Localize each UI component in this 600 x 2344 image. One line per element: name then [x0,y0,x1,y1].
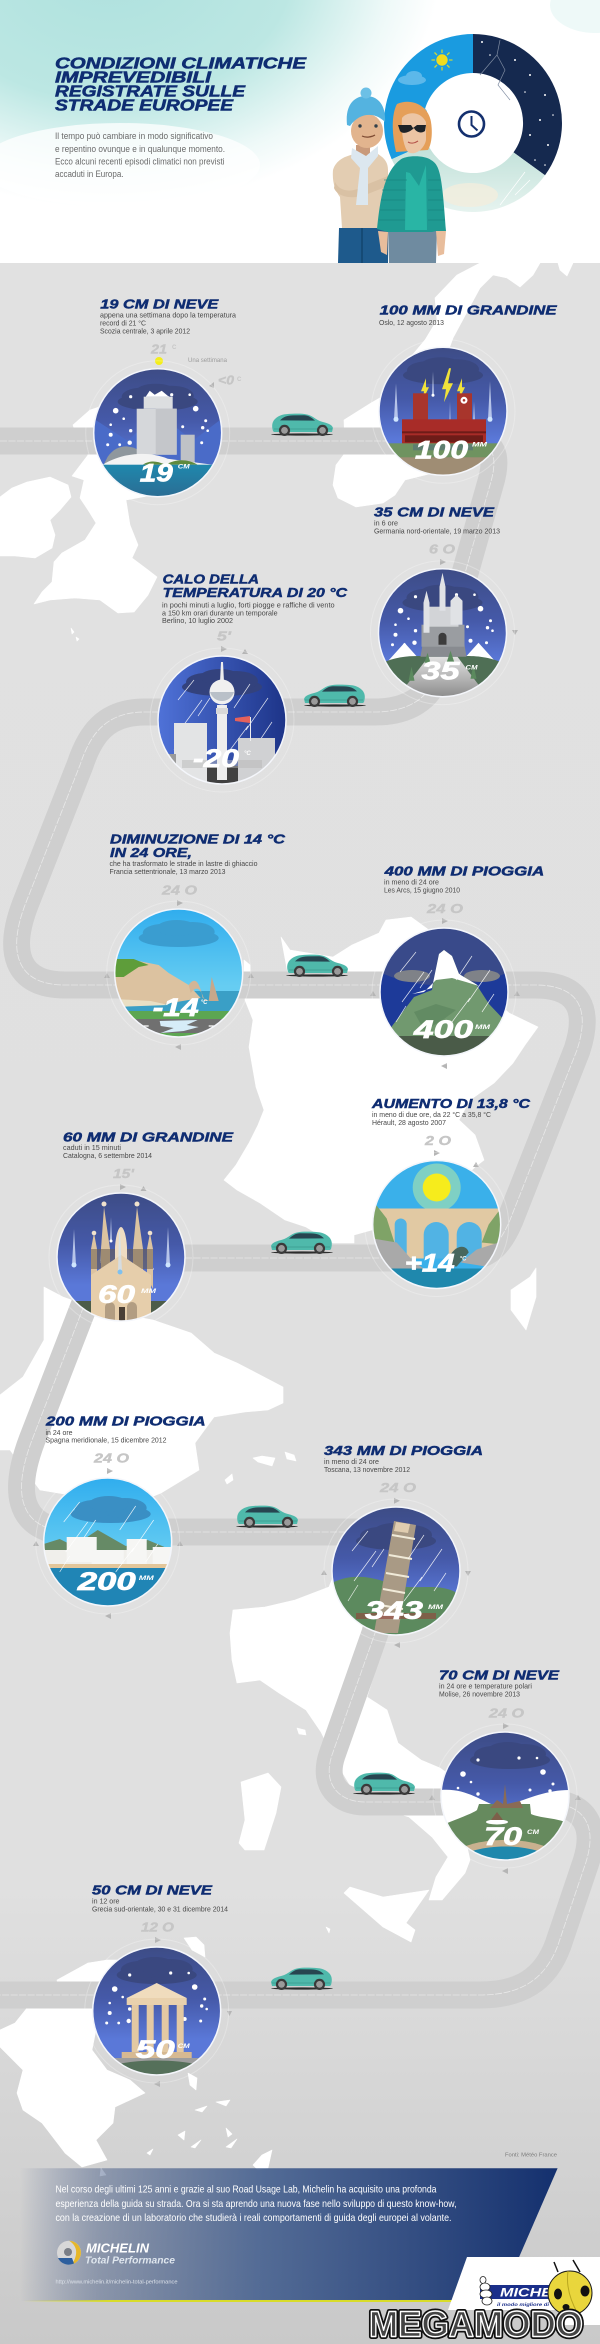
scene: white cliffs with icy road [107,901,251,1045]
description: caduti in 15 minuti [63,1143,121,1152]
Michelin banner [480,2276,556,2307]
Michelin banner: il modo migliore di [497,2302,550,2307]
footer text: con la creazione di un laboratorio che studierà i reali comportamenti di guida degli europei al volante. [56,2213,452,2224]
description [372,1110,491,1127]
description: Toscana, 13 novembre 2012 [324,1465,410,1474]
timeline label [33,1451,183,1619]
heading: 400 MM DI PIOGGIA [383,864,544,878]
map of Europe (white land) [0,263,573,2176]
scene: castle on hill: CM [466,666,479,672]
title: IMPREVEDIBILI [55,70,212,86]
scene: rainy mountain: 400 [413,1016,473,1044]
scene: rainy mountain [372,920,516,1064]
ring segment: clear sky [384,34,473,159]
timeline label: 24 O [488,1706,524,1721]
description: Oslo, 12 agosto 2013 [379,318,444,327]
timeline labels [150,341,242,388]
ladybug icon [548,2260,592,2315]
description: Molise, 26 novembre 2013 [439,1690,520,1698]
Michelin wordmark: Total Performance [85,2255,176,2266]
event 7: heat in Hérault [365,1097,531,1296]
scene: Sagrada Familia in hail: MM [141,1289,157,1295]
timeline label: 24 O [426,901,463,916]
description [374,518,500,535]
scene: leaning tower of Pisa [324,1499,468,1643]
heading: 60 MM DI GRANDINE [63,1130,234,1144]
scene: TV tower in storm [150,648,294,792]
description: in meno di 24 ore [324,1457,379,1466]
description: Francia settentrionale, 13 marzo 2013 [110,867,226,876]
scene: Sagrada Familia in hail: 60 [98,1281,135,1309]
event 6: rain at Les Arcs [370,864,544,1069]
description: Spagna meridionale, 15 dicembre 2012 [46,1436,166,1444]
description [384,878,460,894]
scene: white cliffs with icy road: -14 [153,994,199,1022]
description: in meno di 24 ore [384,878,439,886]
heading: IN 24 ORE, [110,846,192,860]
heading [163,572,348,600]
MEGAMODO wordmark: MEGAMODO [369,2304,583,2344]
description [110,859,258,876]
heading: 19 CM DI NEVE [100,297,219,311]
description: Les Arcs, 15 giugno 2010 [384,886,460,894]
event 5: temperature drop in northern France [104,832,286,1050]
heading: 200 MM DI PIOGGIA [45,1415,206,1429]
timeline label [424,1133,479,1167]
timeline labels: C [237,377,242,383]
event 12: snow in Greece [85,1883,232,2087]
road [0,441,590,1995]
title: CONDIZIONI CLIMATICHE [55,56,307,72]
title [55,56,307,115]
scene: castle in snow: 19 [140,460,173,488]
description [92,1896,228,1914]
event 4: temperature drop in Berlin [150,572,348,792]
source note: Fonti: Météo France [505,2152,557,2158]
intro paragraph: accaduti in Europa. [55,169,124,179]
timeline label: 24 O [161,883,197,898]
timeline label: 12 O [141,1919,174,1934]
car [304,685,366,707]
scene: coast town in rain: 200 [76,1568,136,1596]
description: Catalogna, 6 settembre 2014 [63,1151,152,1160]
description: in 12 ore [92,1896,120,1906]
heading: 343 MM DI PIOGGIA [324,1444,483,1458]
description [46,1428,166,1444]
car [286,955,348,977]
description [63,1143,152,1160]
heading: 100 MM DI GRANDINE [380,303,557,317]
timeline label: 15' [113,1166,135,1181]
scene: Greek temple in snow: 50 [136,2036,175,2064]
timeline label [113,1166,146,1191]
description: in 24 ore e temperature polari [439,1682,532,1690]
watermark badge [369,2257,600,2344]
heading: CALO DELLA [163,572,259,586]
description: record di 21 °C [100,318,146,328]
description [324,1457,410,1474]
scene: snowy village [433,1724,577,1868]
scene: aqueduct under sun: +14 [405,1250,455,1278]
timeline label: 24 O [379,1480,416,1495]
car [271,1968,333,1990]
scene: castle on hill: 35 [422,658,461,686]
scene: city hall under hail [372,346,508,476]
timeline label: 2 O [424,1133,451,1148]
timeline labels: <0 [218,372,235,388]
scene: leaning tower of Pisa: MM [428,1605,444,1611]
intro paragraph: Il tempo può cambiare in modo significativo [55,131,213,141]
heading: 35 CM DI NEVE [374,506,495,520]
timeline labels: Una settimana [188,358,228,364]
description: Germania nord-orientale, 19 marzo 2013 [374,526,500,535]
header background sky [0,0,600,263]
intro paragraph [55,131,225,179]
event 3: snow in Germany [370,506,518,705]
scene: castle in snow: CM [178,465,191,471]
intro paragraph: Ecco alcuni recenti episodi climatici non previsti [55,156,224,166]
scene: leaning tower of Pisa: 343 [365,1597,423,1625]
scene: Sagrada Familia in hail [49,1185,193,1329]
timeline label [141,1919,232,2087]
heading: AUMENTO DI 13,8 °C [371,1097,531,1111]
intro paragraph: e repentino ovunque e in qualunque momento. [55,144,225,154]
scene: coast town in rain: MM [139,1576,155,1582]
timeline label: 5' [217,629,232,644]
timeline labels: 21 [150,341,167,356]
description [100,310,236,336]
scene: snowy village: CM [527,1830,540,1836]
description: a 150 km orari durante un temporale [162,608,278,617]
timeline label [217,629,248,654]
Michelin logo icon [57,2241,81,2265]
timeline label: 6 O [429,541,455,556]
ring segment: starry night [473,34,562,175]
scene: rainy mountain: MM [475,1025,491,1031]
heading: TEMPERATURA DI 20 °C [163,586,348,600]
timeline label [104,883,254,1050]
description: in 6 ore [374,518,398,527]
scene: snowy village: 70 [484,1823,522,1851]
scene: Greek temple in snow [85,1939,229,2083]
title: STRADE EUROPEE [55,98,234,115]
event 1: snow in Scotland [86,297,242,505]
character: man with hat and scarf [333,88,388,263]
description: Grecia sud-orientale, 30 e 31 dicembre 2014 [92,1904,228,1914]
scene: coast town in rain [36,1470,180,1614]
car [236,1506,298,1528]
footer text: esperienza della guida su strada. Ora si sta aprendo una nuova fase nello sviluppo di questo know-how, [56,2199,456,2210]
title: REGISTRATE SULLE [55,84,246,101]
description: in meno di due ore, da 22 °C a 35,8 °C [372,1110,491,1119]
ring segment: rain [392,143,545,212]
timeline labels: C [172,345,177,351]
scene: castle on hill [370,561,514,705]
timeline label [370,901,520,1069]
timeline label: 24 O [93,1451,129,1466]
event 8: hail in Catalonia [49,1130,234,1329]
description: che ha trasformato le strade in lastre di ghiaccio [110,859,258,868]
description: in pochi minuti a luglio, forti piogge e raffiche di vento [162,600,335,610]
URL: http://www.michelin.it/michelin-total-performance [56,2280,178,2286]
scene: city hall under hail: 100 [415,436,468,464]
car [271,1232,333,1254]
car [353,1773,415,1795]
scene: city hall under hail: MM [472,442,488,448]
footer text: Nel corso degli ultimi 125 anni e grazie al suo Road Usage Lab, Michelin ha acquisito una profonda [56,2184,437,2196]
description: Hérault, 28 agosto 2007 [372,1118,446,1127]
scene: Greek temple in snow: CM [178,2044,191,2050]
event 10: rain in Tuscany [321,1444,483,1648]
character: woman with sunglasses [377,102,446,263]
event 9: rain in southern Spain [33,1415,206,1619]
heading: DIMINUZIONE DI 14 °C [110,832,286,846]
footer text [56,2184,456,2224]
scene: aqueduct under sun [365,1152,509,1296]
clock ring: day, night and rain [384,34,562,212]
description: Scozia centrale, 3 aprile 2012 [100,326,190,336]
scene: white cliffs with icy road: °C [201,1000,208,1006]
heading: 70 CM DI NEVE [439,1668,560,1682]
description [162,600,335,625]
description: appena una settimana dopo la temperatura [100,310,236,320]
timeline label [429,1706,581,1874]
scene: castle in snow [86,361,230,505]
description: in 24 ore [46,1428,72,1437]
description [439,1682,532,1698]
heading [110,832,286,860]
MEGAMODO wordmark: MEGAMODO [369,2304,583,2344]
footer panel [20,2168,558,2302]
Michelin wordmark: MICHELIN [86,2241,150,2256]
scene: aqueduct under sun: °C [460,1256,467,1262]
car [271,414,333,436]
event 2: hail in Oslo [371,303,557,483]
scene: TV tower in storm: °C [244,751,251,757]
Michelin banner: MICHE [500,2288,552,2300]
timeline label [321,1480,471,1648]
event 11: snow in Molise [429,1668,581,1874]
scene: TV tower in storm: -20 [193,745,239,773]
description: Berlino, 10 luglio 2002 [162,616,233,625]
heading: 50 CM DI NEVE [92,1883,213,1897]
Michelin wordmark [85,2241,176,2266]
clock icon [459,112,484,136]
timeline label [429,541,518,635]
